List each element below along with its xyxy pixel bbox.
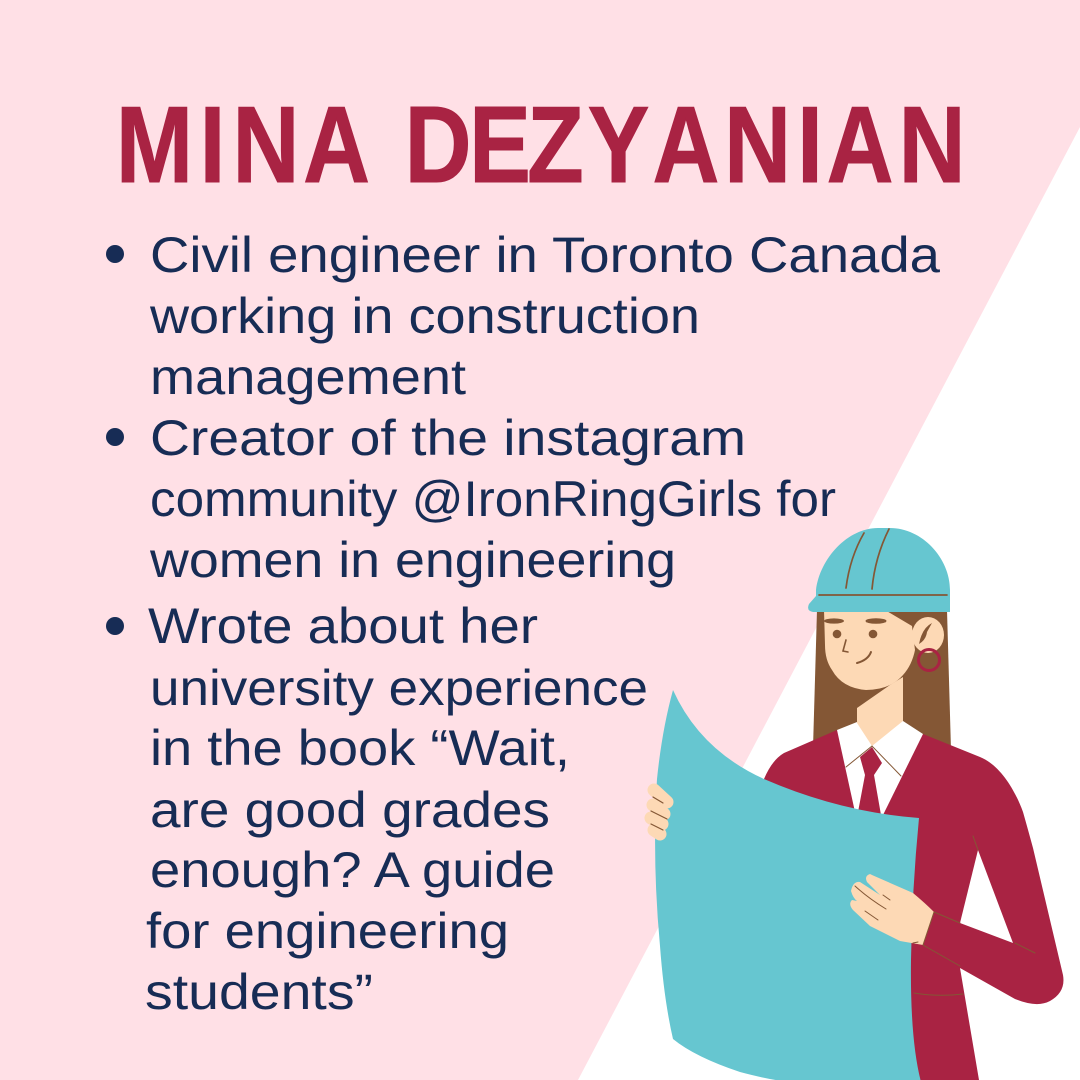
hair [813, 610, 951, 750]
blueprint paper [655, 690, 921, 1080]
bullet: civil engineer: working in construction [149, 288, 700, 344]
eyebrows [824, 618, 844, 624]
bullet: book: for engineering [146, 903, 509, 959]
ear [912, 617, 944, 653]
bullet: instagram community: women in engineering [149, 532, 676, 588]
bullet: book: in the book “Wait, [150, 720, 570, 776]
tie [858, 747, 882, 815]
hard hat lines [819, 529, 947, 595]
shirt [837, 721, 923, 815]
bullet: book: Wrote about her [148, 598, 538, 654]
hard hat [808, 528, 950, 612]
bullet: civil engineer [106, 227, 940, 405]
nose [843, 640, 848, 652]
gap between arm and body [960, 850, 1013, 943]
bullet: book: are good grades [150, 782, 550, 838]
bullet: book: enough? A guide [150, 842, 555, 898]
left hand [651, 790, 667, 834]
suit [760, 730, 1063, 1080]
face [824, 610, 915, 690]
earring [918, 650, 940, 670]
bullet: civil engineer: management [150, 349, 466, 405]
smile [857, 652, 871, 663]
bullet: instagram community: community @IronRingGirls for [150, 471, 836, 527]
inner ear [919, 623, 932, 644]
collar lines [846, 746, 901, 776]
right hand [850, 874, 934, 945]
sleeve and suit seams [914, 836, 1035, 995]
bullet: instagram community: Creator of the instagram [150, 410, 746, 466]
bullet: book: students” [145, 964, 373, 1020]
neck [857, 677, 903, 746]
bullet: instagram community [106, 410, 836, 588]
illustration: woman engineer holding blueprint [651, 528, 1063, 1080]
bullet: book [106, 598, 648, 1020]
bullet: civil engineer: Civil engineer in Toronto Canada [150, 227, 940, 283]
bullet: book: university experience [150, 660, 648, 716]
title: MINA DEZYANIAN [116, 84, 966, 206]
eyes [833, 630, 841, 638]
